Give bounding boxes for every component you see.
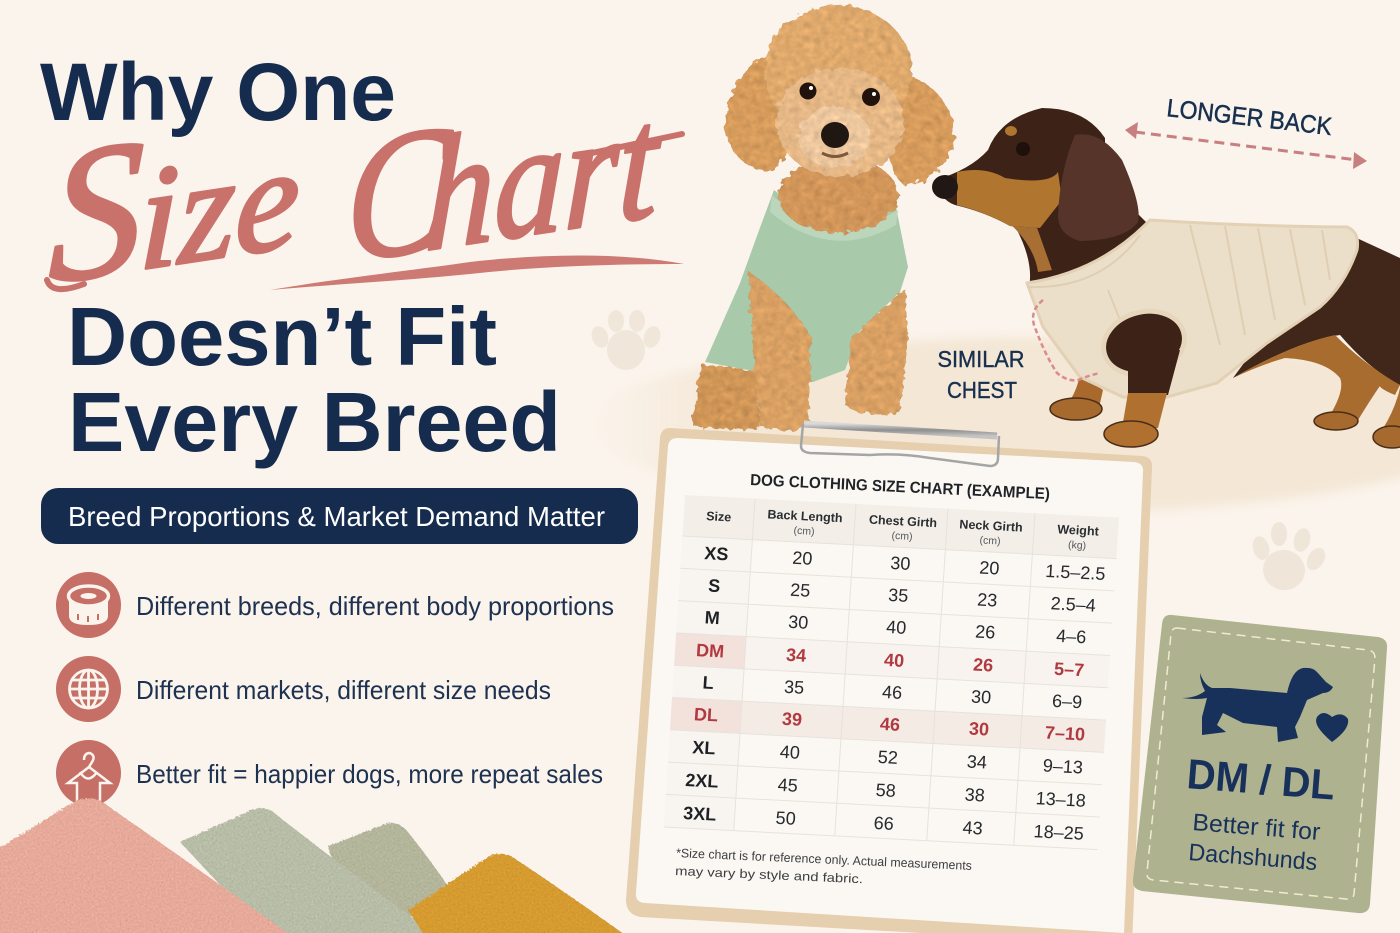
- dachshund rear body: [1233, 228, 1400, 385]
- icon: dachshund silhouette: [1182, 668, 1333, 742]
- table values: 4–6: [1056, 626, 1087, 647]
- table grid: [664, 495, 1119, 850]
- badge caption: Dachshunds: [1188, 839, 1318, 876]
- pink chest measuring loop: [1033, 300, 1100, 380]
- table size column: L: [702, 673, 714, 693]
- poodle eye highlights: [809, 86, 876, 96]
- poodle haunch: [692, 365, 760, 429]
- title line: Why One: Why One: [40, 47, 396, 138]
- table values: 66: [873, 813, 894, 834]
- table header: Neck Girth: [959, 517, 1023, 535]
- dachshund vest: [1027, 220, 1358, 397]
- bullet: body proportions: [56, 572, 614, 638]
- bullet: repeat sales: [56, 740, 603, 808]
- label: similar chest: CHEST: [947, 377, 1017, 403]
- badge patch: [1133, 615, 1387, 913]
- towel: pink: [0, 798, 325, 933]
- badge caption: Better fit for: [1192, 809, 1321, 846]
- table highlighted sizes: [691, 640, 1090, 745]
- arrow: longer back: [1125, 122, 1367, 169]
- table values: 43: [962, 818, 983, 839]
- icon: tape measure: [56, 572, 121, 638]
- table values: 1.5–2.5: [1045, 561, 1106, 584]
- bullet: size needs: Different markets, different size needs: [136, 675, 551, 705]
- bullet: body proportions: Different breeds, different body proportions: [136, 591, 614, 621]
- table values: 2.5–4: [1050, 593, 1096, 616]
- poodle front leg left: [749, 272, 811, 430]
- table highlighted sizes: DL: [693, 704, 719, 725]
- dachshund muzzle tan: [957, 170, 1062, 228]
- table size column: [683, 543, 733, 825]
- brush underline: [270, 256, 684, 290]
- badge stitching: [1147, 628, 1375, 899]
- table values: 23: [977, 590, 998, 611]
- table values: 9–13: [1042, 755, 1084, 778]
- table highlighted sizes: 34: [785, 645, 807, 666]
- badge: DM / DL: [1133, 615, 1387, 913]
- table header units: (kg): [1068, 539, 1086, 552]
- icon: heart: [1316, 713, 1348, 742]
- table size column: M: [704, 607, 720, 628]
- table values: 18–25: [1033, 821, 1084, 844]
- table values: 40: [779, 742, 801, 763]
- table values: [775, 548, 1106, 844]
- dachshund eye: [1016, 142, 1030, 156]
- t crossbar and S tail: [47, 134, 682, 289]
- table highlighted sizes: 30: [968, 719, 990, 740]
- title script: Size Chart: Chart: [344, 54, 664, 302]
- bullet: repeat sales: Better fit = happier dogs, more repeat sales: [136, 759, 603, 789]
- poodle eyes: [800, 82, 880, 106]
- chart footnote: *Size chart is for reference only. Actual measurements: [676, 846, 972, 873]
- subtitle pill: [41, 488, 638, 544]
- table values: 50: [775, 808, 796, 829]
- table header: Size: [706, 509, 732, 524]
- table highlighted sizes: 39: [781, 709, 803, 730]
- poodle neck fur: [778, 157, 898, 233]
- table values: 35: [783, 677, 805, 698]
- dachshund front leg tan: [1122, 393, 1167, 428]
- table highlighted sizes: DM: [696, 640, 725, 662]
- table values: 20: [792, 548, 813, 569]
- dachshund vest quilting: [1027, 225, 1330, 345]
- table values: 26: [975, 622, 996, 643]
- poodle: [692, 5, 955, 430]
- dachshund hind legs: [1233, 335, 1400, 432]
- label: longer back: LONGER BACK: [1165, 94, 1334, 141]
- badge caption: [1188, 809, 1321, 876]
- table header units: (cm): [891, 530, 913, 543]
- clipboard: [626, 424, 1152, 933]
- icon: hanger with shirt: [56, 740, 121, 808]
- table values: 40: [886, 617, 907, 638]
- poodle nose: [821, 122, 849, 148]
- size chart table: [664, 495, 1119, 850]
- table header: Back Length: [767, 507, 843, 525]
- table values: 30: [788, 612, 809, 633]
- title line: Every Breed: Every Breed: [68, 375, 561, 469]
- table size column: 2XL: [685, 770, 719, 792]
- table values: 38: [964, 785, 985, 806]
- bullet: size needs: [56, 656, 551, 722]
- floor shadow: [590, 337, 1400, 513]
- table header: [706, 504, 1100, 544]
- poodle muzzle: [798, 106, 870, 168]
- table values: 34: [966, 752, 988, 773]
- table header units: (cm): [979, 534, 1001, 548]
- label: similar chest: [938, 346, 1024, 403]
- dachshund eyebrow tan: [1005, 126, 1017, 136]
- table values: 45: [777, 775, 798, 796]
- clipboard clip: [801, 424, 999, 466]
- badge title: DM / DL: [1185, 750, 1337, 809]
- table highlighted sizes: 5–7: [1053, 659, 1085, 680]
- table size column: S: [708, 576, 721, 596]
- poodle left ear: [724, 57, 795, 172]
- table header units: (cm): [793, 525, 815, 538]
- dachshund neck: [1016, 150, 1146, 288]
- poodle face: [776, 67, 904, 177]
- chart footnote: [675, 846, 972, 886]
- table highlighted sizes: 40: [883, 650, 905, 671]
- table size column: XL: [692, 737, 716, 758]
- table highlighted sizes: 46: [879, 714, 901, 735]
- dachshund neck tan stripe: [1008, 222, 1052, 272]
- title: [40, 47, 684, 469]
- table values: 30: [970, 687, 992, 708]
- table size column: XS: [704, 543, 729, 564]
- table values: 6–9: [1051, 691, 1083, 712]
- dachshund head: [935, 108, 1105, 228]
- paw print: upper: [589, 310, 663, 370]
- poodle front leg right: [846, 288, 908, 415]
- towel: mustard: [408, 854, 660, 933]
- label: similar chest: SIMILAR: [938, 346, 1024, 372]
- dachshund far leg: [1062, 375, 1103, 412]
- poodle mouth: [822, 153, 848, 156]
- dachshund front paw: [1104, 421, 1158, 447]
- table values: 30: [890, 553, 911, 574]
- dachshund armhole: [1096, 302, 1192, 384]
- towel: sage: [180, 808, 470, 933]
- dachshund front leg: [1128, 350, 1180, 397]
- poodle right ear: [885, 75, 955, 186]
- table header: Weight: [1057, 522, 1100, 539]
- title line: Doesn't Fit: Doesn’t Fit: [67, 290, 497, 383]
- chart footnote: may vary by style and fabric.: [675, 864, 863, 886]
- table header: Chest Girth: [869, 513, 938, 530]
- clipboard board: [626, 428, 1152, 933]
- title script: Size Chart: Size: [47, 74, 303, 325]
- table values: 13–18: [1035, 788, 1086, 811]
- poodle sweater: [705, 190, 908, 382]
- chart title: DOG CLOTHING SIZE CHART (EXAMPLE): [750, 472, 1050, 503]
- table highlighted sizes: 26: [972, 655, 994, 676]
- folded fabric towels: [0, 798, 660, 933]
- towel: back sage: [328, 823, 452, 933]
- table values: 20: [979, 558, 1000, 579]
- dachshund paws: [1050, 398, 1400, 448]
- table highlighted sizes: 7–10: [1044, 722, 1086, 745]
- table values: 25: [790, 580, 811, 601]
- dachshund ear: [1058, 134, 1139, 241]
- table values: 46: [881, 682, 903, 703]
- table backgrounds: [664, 495, 1119, 850]
- icon: globe: [56, 656, 121, 722]
- subtitle pill: Breed Proportions & Market Demand Matter: [68, 501, 605, 532]
- clipboard paper: [636, 438, 1143, 933]
- table values: 52: [877, 747, 899, 768]
- dachshund nose: [932, 175, 958, 199]
- title script: Size Chart: [47, 54, 682, 325]
- poodle sweater collar: [770, 195, 898, 241]
- dachshund: [932, 108, 1400, 448]
- poodle topknot: [764, 5, 912, 139]
- table values: 58: [875, 780, 896, 801]
- table size column: 3XL: [683, 803, 717, 825]
- table values: 35: [888, 585, 909, 606]
- paw print: lower: [1250, 522, 1329, 595]
- table header units: [793, 525, 1086, 552]
